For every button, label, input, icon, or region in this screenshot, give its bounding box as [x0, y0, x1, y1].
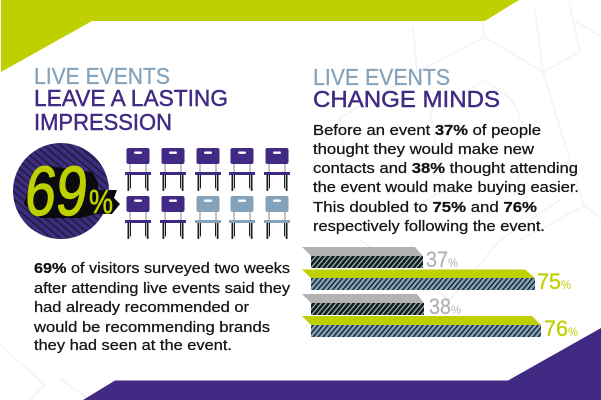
bar pair: 37%: 37	[426, 247, 448, 272]
top green banner	[1, 0, 519, 72]
text: change minds paragraph	[313, 123, 579, 235]
text: change minds paragraph: respectively following the event.	[313, 219, 545, 235]
69% badge: %	[89, 183, 113, 220]
heading: live events leave a lasting impression: LIVE EVENTS	[34, 63, 170, 89]
heading: live events change minds: CHANGE MINDS	[313, 86, 500, 112]
bar pair: 38%: %	[451, 303, 461, 317]
heading: live events change minds	[313, 64, 500, 112]
text: lasting impression paragraph: after attending live events said they	[34, 281, 291, 297]
bar pair: 75%: %	[561, 278, 571, 292]
bar pair: 76%: %	[568, 325, 578, 339]
bar pair: 76%	[302, 316, 578, 341]
text: lasting impression paragraph: would be recommending brands	[33, 320, 270, 336]
bar pair: 75%: 75	[537, 269, 561, 294]
chair pictogram: 7 of 10 purple	[125, 148, 290, 239]
text: lasting impression paragraph	[33, 261, 291, 354]
heading: live events leave a lasting impression	[34, 63, 228, 135]
heading: live events change minds: LIVE EVENTS	[313, 64, 450, 90]
bar pair: 75%	[302, 269, 571, 294]
bar pair: 76%: 76	[544, 316, 568, 341]
heading: live events leave a lasting impression: IMPRESSION	[34, 109, 172, 135]
text: lasting impression paragraph: they had seen at the event.	[34, 338, 232, 354]
text: change minds paragraph: This doubled to 75% and 76%	[313, 200, 537, 216]
bar pair: 38%	[302, 294, 461, 319]
69% badge	[13, 143, 120, 239]
bottom purple banner	[83, 328, 601, 400]
text: change minds paragraph: Before an event 37% of people	[313, 123, 541, 139]
bar pair: 38%: 38	[429, 294, 451, 319]
text: lasting impression paragraph: 69% of visitors surveyed two weeks	[34, 261, 290, 277]
bar pair: 37%: %	[448, 256, 458, 270]
heading: live events leave a lasting impression: LEAVE A LASTING	[34, 85, 228, 111]
text: change minds paragraph: thought they would make new	[313, 142, 535, 158]
69% badge: 69	[21, 151, 92, 230]
text: lasting impression paragraph: had already recommended or	[34, 300, 249, 316]
bar pair: 37%	[302, 247, 458, 272]
text: change minds paragraph: contacts and 38% thought attending	[313, 161, 578, 177]
bar chart: before and after percentages	[302, 247, 578, 341]
text: change minds paragraph: the event would make buying easier.	[313, 180, 579, 196]
